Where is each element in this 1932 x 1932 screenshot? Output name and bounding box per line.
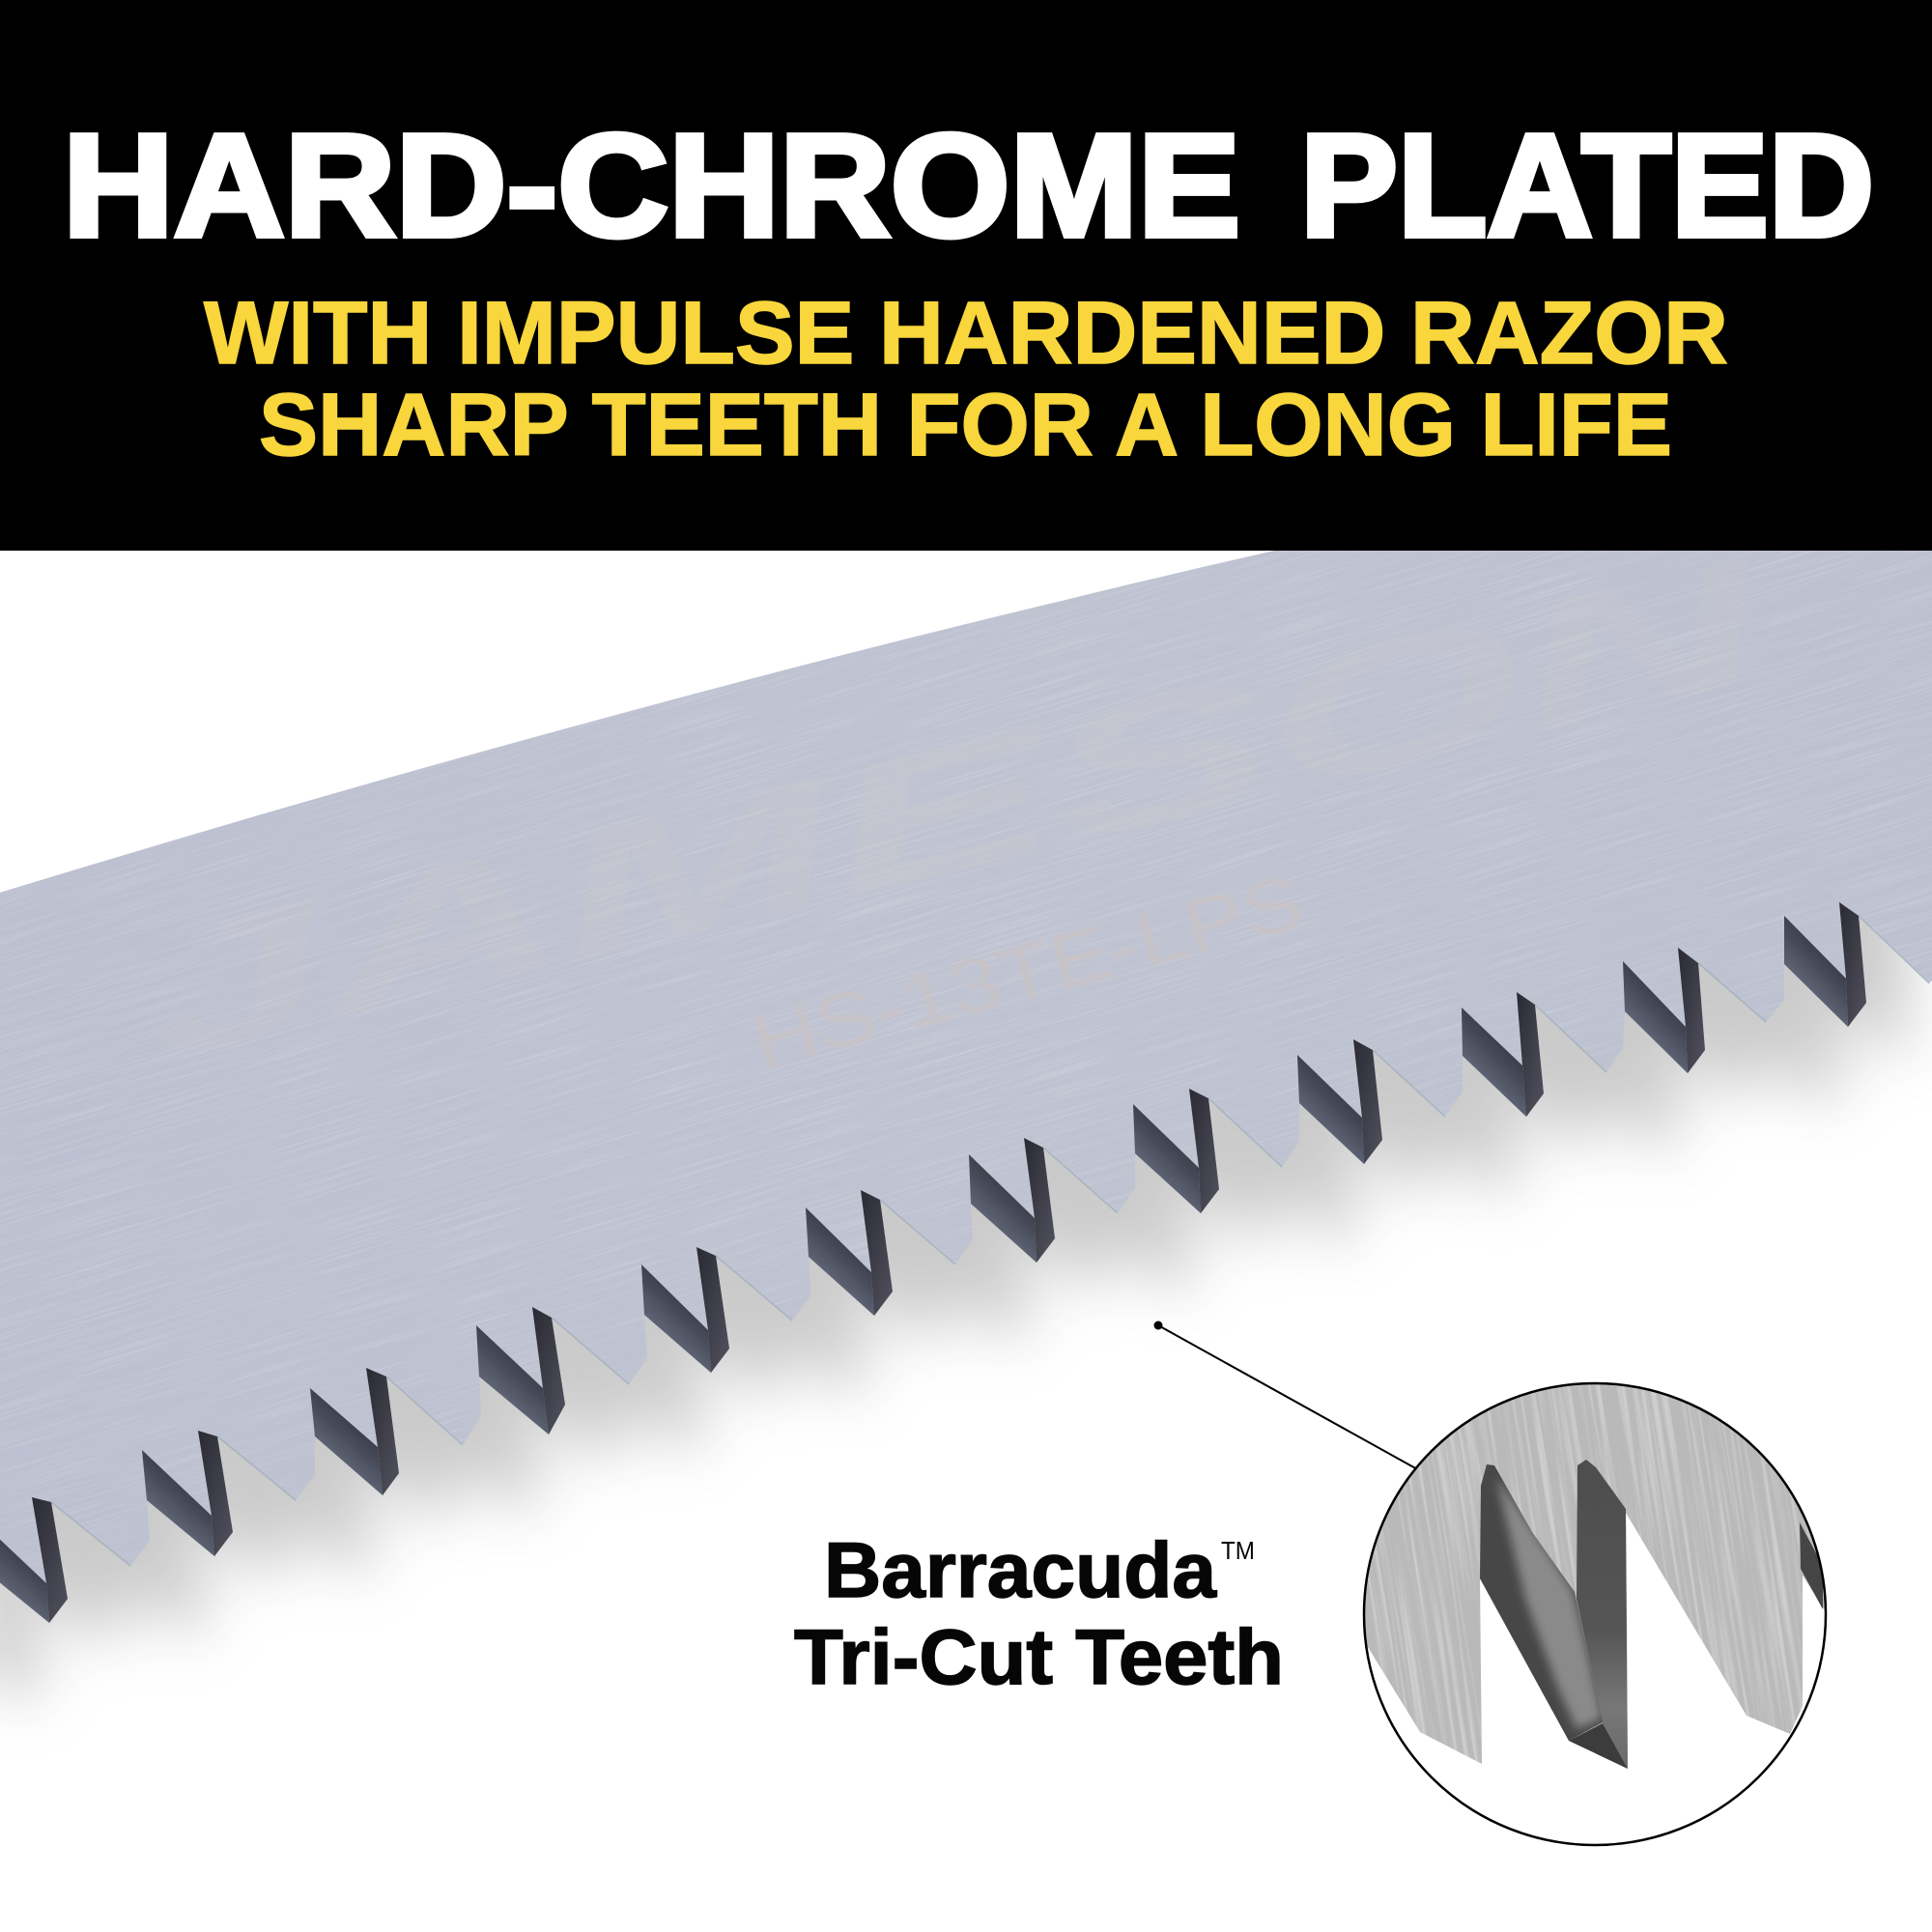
circle outline <box>1364 1383 1826 1845</box>
white inset background <box>1362 1381 1828 1847</box>
faint etched model number: HS-13TE-LPS <box>744 858 1312 1085</box>
callout leader line with dot <box>1153 1321 1419 1470</box>
magnified circle: tri-cut tooth detail <box>1362 1381 1828 1847</box>
magnified blade <box>1362 1382 1825 1769</box>
serrated teeth row <box>0 902 1866 1623</box>
panel: saw blade <box>0 551 1932 1623</box>
dark tooth facet left <box>1480 1464 1603 1741</box>
title <box>63 103 1874 267</box>
subtitle line 1: WITH IMPULSE HARDENED RAZOR <box>204 284 1728 383</box>
black band background <box>0 0 1932 551</box>
blade body <box>0 551 1932 1623</box>
soft shadow under saw blade <box>0 633 1908 1705</box>
next tooth at edge <box>1800 1522 1823 1609</box>
callout label: Barracuda Tri-Cut Teeth: Tri-Cut Teeth <box>794 1614 1284 1701</box>
brushed metal texture <box>0 551 1932 1476</box>
tooth tip facet <box>1569 1723 1628 1769</box>
subtitle line 2: SHARP TEETH FOR A LONG LIFE <box>259 376 1672 474</box>
pale bright edges of the light teeth <box>51 916 1929 1566</box>
callout label: Barracuda Tri-Cut Teeth <box>794 1527 1284 1701</box>
callout label: Barracuda Tri-Cut Teeth: Barracuda <box>824 1527 1217 1614</box>
faint etched logo: JAMESON <box>118 519 1786 1099</box>
callout label: Barracuda Tri-Cut Teeth: TM <box>1221 1536 1255 1565</box>
title: HARD-CHROME <box>63 103 1240 267</box>
title: PLATED <box>1300 103 1874 267</box>
header band <box>0 0 1932 551</box>
mid grey bevel <box>1496 1476 1603 1729</box>
magnified brushed texture <box>1368 1385 1810 1762</box>
dark tooth facet right <box>1577 1460 1628 1769</box>
